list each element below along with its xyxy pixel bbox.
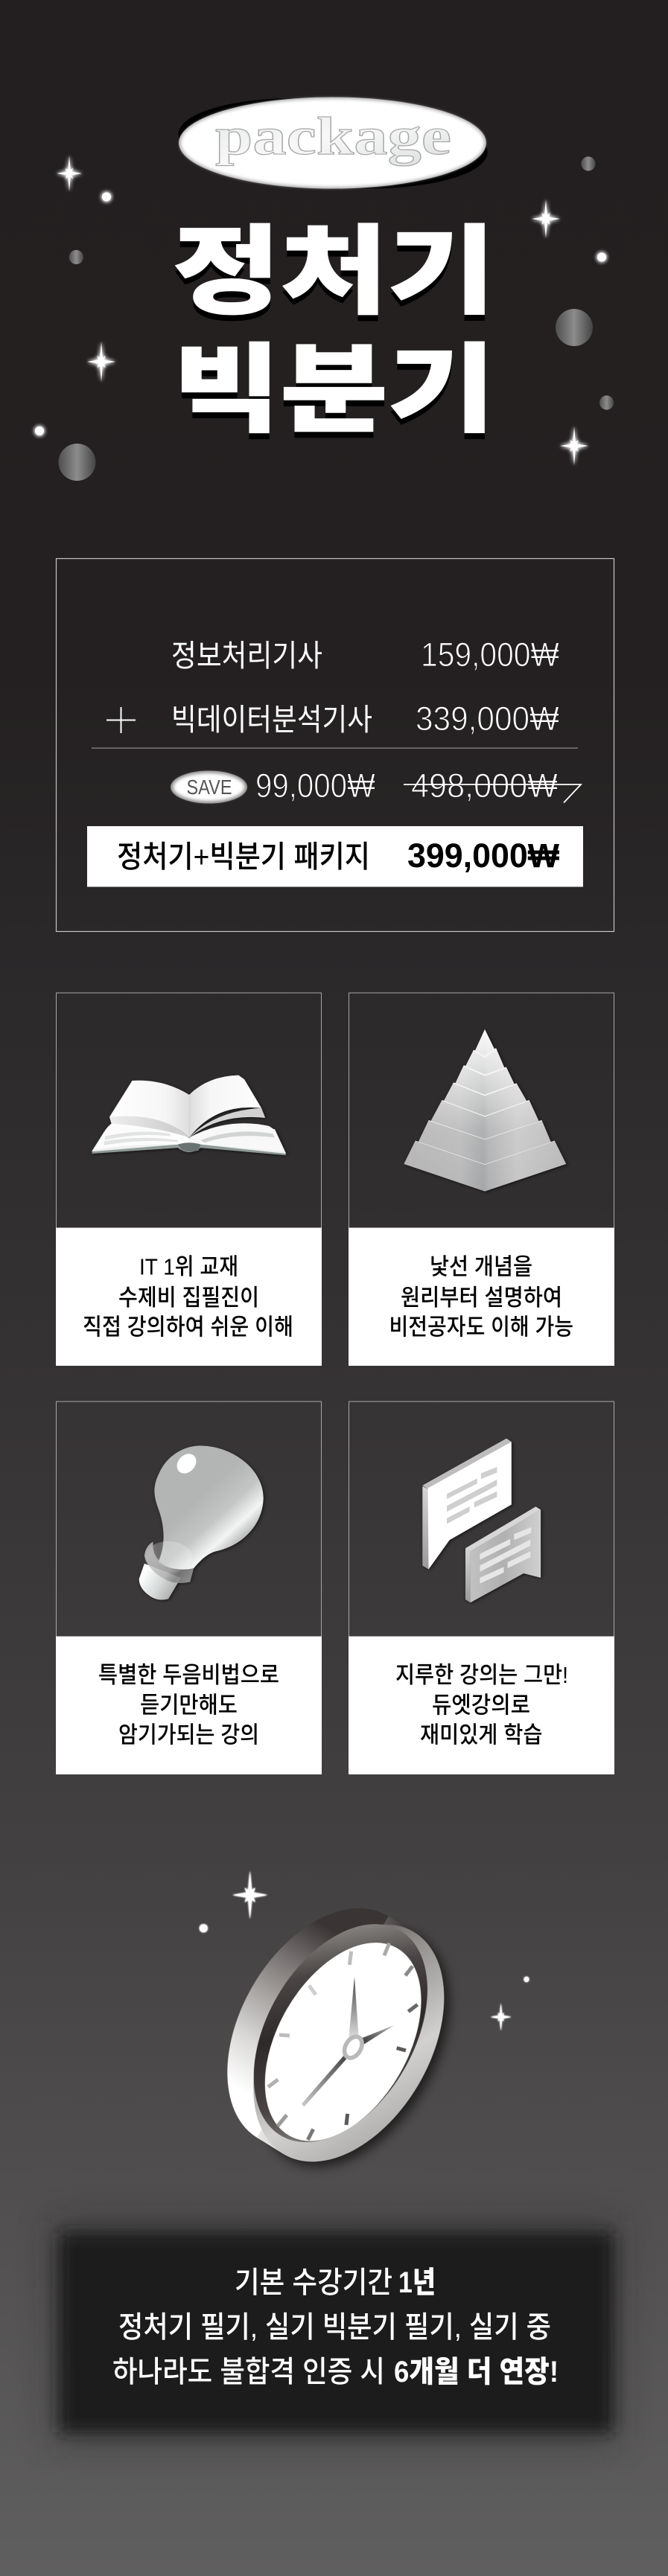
title: 정처기: 정처기 [173,223,495,332]
saving amount: 99,000₩ [255,767,375,805]
card text: 특별한 두음비법으로 [98,1662,279,1688]
panel: concept card [349,993,614,1366]
card text: 비전공자도 이해 가능 [389,1314,573,1340]
card text: 듣기만해도 [140,1693,238,1718]
price row: 빅데이터분석기사 [171,700,559,738]
panel: textbook card [56,993,322,1366]
title: 정처기: 정처기 [173,217,495,326]
panel: duet lecture card [349,1402,614,1774]
icon: speech bubbles [422,1439,541,1602]
price row: 빅데이터분석기사: 339,000₩ [416,700,559,738]
price row: 정보처리기사: 159,000₩ [421,636,559,674]
callout line 1: 1년 [398,2266,436,2299]
card text: 암기가되는 강의 [118,1722,259,1748]
save badge [171,771,247,804]
package badge [176,89,490,197]
clock ticks [268,1943,418,2140]
card text: 직접 강의하여 쉬운 이해 [83,1314,293,1340]
callout line 2: 정처기 필기, 실기 빅분기 필기, 실기 중 [118,2311,551,2344]
title: 빅분기: 빅분기 [173,336,495,444]
icon: wall clock [188,1875,489,2200]
clock hands [302,1977,394,2107]
card text: IT 1위 교재 [139,1253,238,1280]
callout line 1: 기본 수강기간 [235,2266,392,2299]
package price bar: 정처기+빅분기 패키지 [117,840,370,874]
card text [83,1253,293,1340]
hero sparkles and orbs [35,156,614,481]
original price struck through: 498,000₩ [411,767,559,805]
card text [395,1662,568,1748]
card text: 지루한 강의는 그만! [395,1662,568,1688]
card text: 낯선 개념을 [430,1253,532,1280]
card text: 재미있게 학습 [420,1722,542,1748]
clock sparkles [200,1871,529,2031]
card text: 원리부터 설명하여 [401,1285,562,1311]
callout: study period [52,2222,618,2444]
card text: 듀엣강의로 [432,1693,530,1718]
price row: 정보처리기사: 정보처리기사 [171,639,322,673]
package price bar [87,826,583,887]
save badge: SAVE [186,776,232,799]
card text: 수제비 집필진이 [118,1285,259,1311]
callout line 3 [112,2356,559,2388]
callout line 3: 하나라도 불합격 인증 시 [112,2356,385,2388]
card text [98,1662,279,1748]
panel: mnemonic card [56,1402,322,1774]
panel: pricing [57,558,614,932]
icon: stepped pyramid [404,1029,566,1192]
price row: 정보처리기사 [171,636,559,674]
icon: open book [92,1076,286,1155]
icon: plus [106,707,136,733]
title: 빅분기: 빅분기 [173,342,495,450]
callout line 3: 6개월 더 연장! [394,2356,559,2388]
icon: light bulb [139,1445,264,1600]
package price bar: 399,000₩ [407,837,560,875]
package badge: package [215,106,451,166]
card text [389,1253,573,1340]
price row: 빅데이터분석기사: 빅데이터분석기사 [171,703,372,737]
